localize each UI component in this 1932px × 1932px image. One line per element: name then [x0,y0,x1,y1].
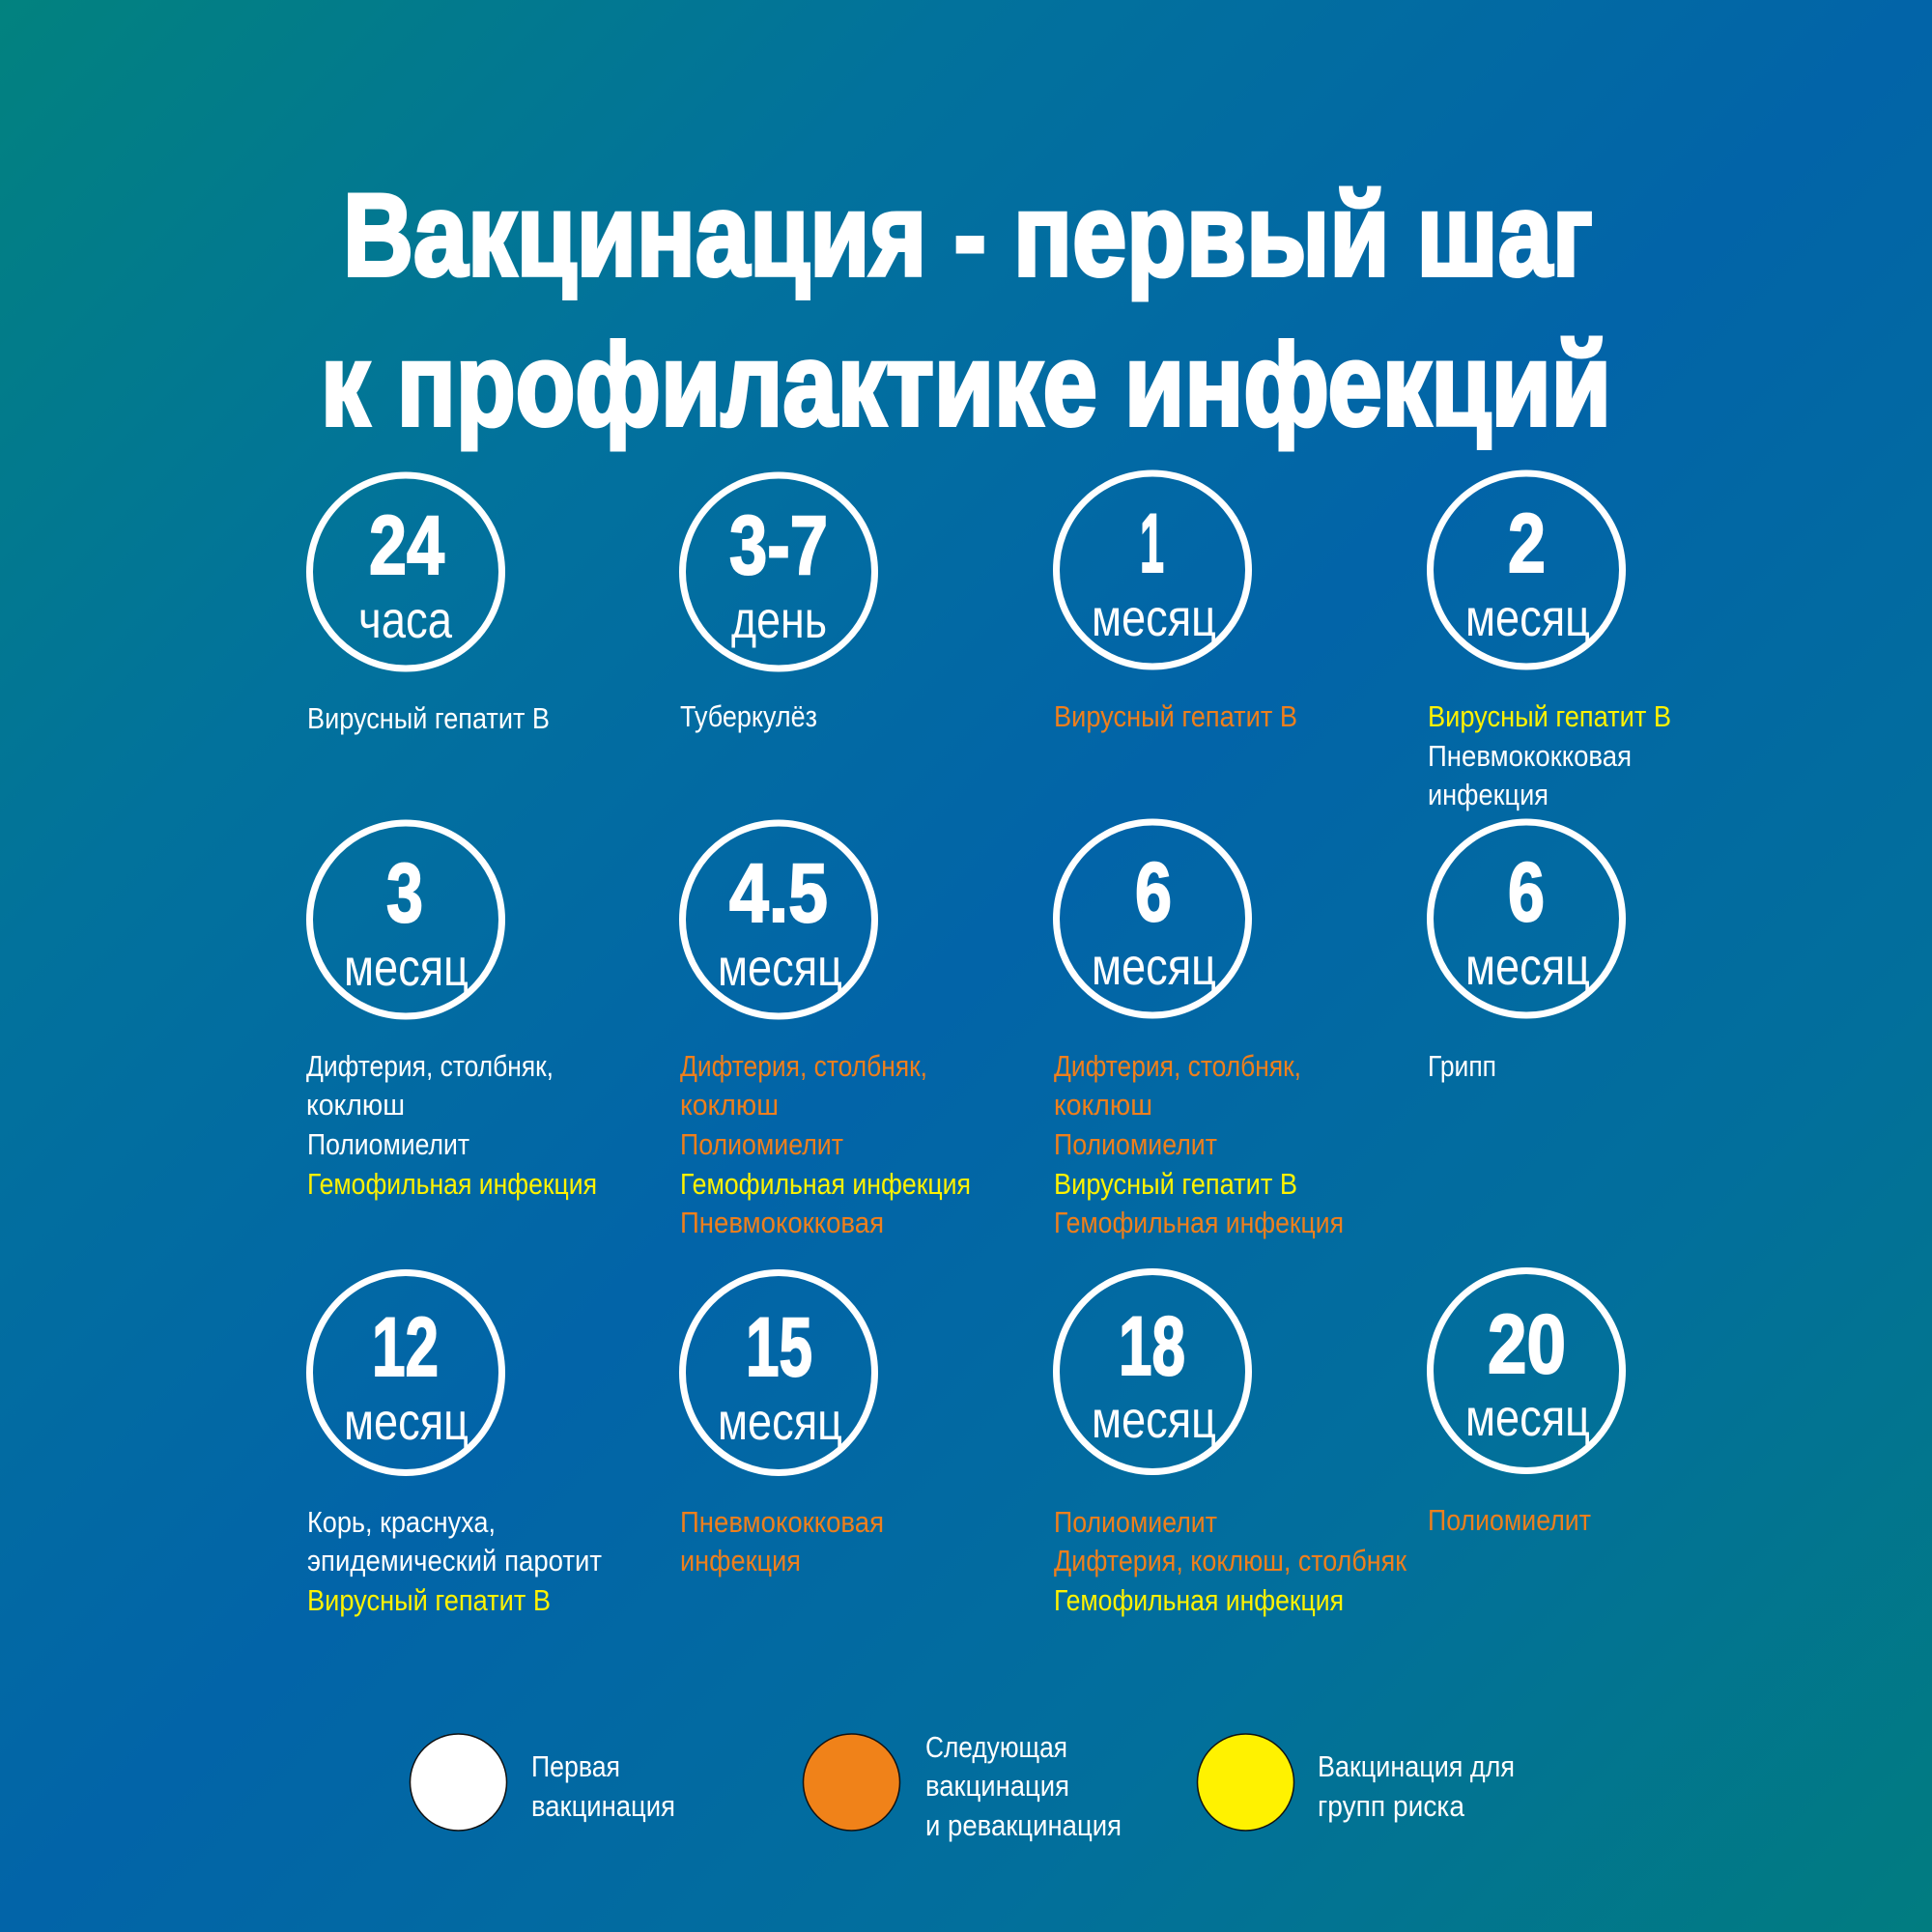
badge: 3 месяц [309,823,502,1016]
badge: 4.5 месяц: месяц [718,939,842,997]
panel: 24 hours: Вирусный гепатит В [307,701,550,735]
legend item: next vaccination and revaccination [804,1730,1122,1842]
panel: 15 months: инфекция [680,1544,801,1577]
panel: 12 months: Вирусный гепатит В [307,1583,551,1617]
panel: 4.5 months: коклюш [680,1088,779,1122]
badge: 20 месяц [1430,1271,1623,1470]
panel: 4.5 months: Пневмококковая [680,1206,884,1239]
panel: 6 months, first: Вирусный гепатит В [1054,1167,1297,1201]
badge: 2 месяц: 2 [1508,497,1546,590]
legend item: first vaccination [410,1734,675,1831]
badge: 4.5 месяц: 4.5 [729,847,828,940]
legend item: first vaccination: Первая [531,1749,620,1783]
badge: 24 часа [309,475,502,668]
panel: 18 months: Полиомиелит [1054,1505,1217,1539]
badge: 20 месяц: 20 [1488,1298,1566,1391]
panel: 15 months: Пневмококковая [680,1505,884,1539]
badge: 1 месяц: 1 [1140,497,1164,590]
panel: 18 months: Дифтерия, коклюш, столбняк [1054,1544,1406,1577]
panel: 2 months: Вирусный гепатит В [1428,699,1671,733]
panel: 1 month [1054,473,1297,733]
panel: 6 months, first: коклюш [1054,1088,1152,1122]
panel: 4.5 months: Дифтерия, столбняк, [680,1049,927,1083]
panel: 12 months: эпидемический паротит [307,1544,602,1577]
panel: 3 months: коклюш [306,1088,405,1122]
badge: 15 месяц: месяц [718,1393,842,1451]
badge: 6 месяц [1057,822,1248,1015]
panel: 3 months: Дифтерия, столбняк, [306,1049,554,1083]
panel: 3 months: Гемофильная инфекция [307,1167,597,1201]
panel: 4.5 months: Гемофильная инфекция [680,1167,971,1201]
badge: 18 месяц [1057,1271,1248,1472]
panel: 3-7 days [680,475,875,733]
badge: 2 месяц [1430,473,1623,667]
panel: 4.5 months [680,823,971,1239]
panel: 18 months: Гемофильная инфекция [1054,1583,1344,1617]
panel: 24 hours [307,475,550,735]
panel: 12 months [307,1273,602,1617]
badge: 3-7 день: 3-7 [729,499,828,592]
legend item: next vaccination and revaccination: и ревакцинация [925,1808,1122,1842]
panel: 2 months: Пневмококковая [1428,739,1632,773]
panel: 20 months: Полиомиелит [1428,1503,1591,1537]
panel: 6 months, first: Гемофильная инфекция [1054,1206,1344,1239]
badge: 12 месяц: 12 [372,1301,439,1394]
badge: 6 месяц: месяц [1092,938,1216,996]
badge: 12 месяц: месяц [344,1393,469,1451]
badge: 12 месяц [309,1273,502,1472]
badge: 1 месяц [1057,473,1248,667]
badge: 6 месяц: 6 [1508,846,1545,939]
badge: 4.5 месяц [682,823,875,1016]
badge: 3 месяц: 3 [386,847,423,940]
panel: 2 months [1428,473,1671,811]
panel: 4.5 months: Полиомиелит [680,1127,843,1161]
badge: 15 месяц: 15 [746,1301,812,1394]
panel: 6 months, flu [1428,822,1623,1083]
legend [410,1730,1515,1842]
title: к профилактике инфекций [321,319,1611,450]
badge: 1 месяц: месяц [1092,589,1216,647]
legend item: next vaccination and revaccination: Следующая [925,1730,1067,1764]
panel: 20 months [1428,1271,1623,1537]
panel: 1 month: Вирусный гепатит В [1054,699,1297,733]
title: Вакцинация - первый шаг [343,169,1593,300]
badge: 6 месяц: 6 [1135,846,1172,939]
badge: 3-7 день [682,475,875,668]
badge: 20 месяц: месяц [1465,1389,1590,1447]
panel: 6 months, first [1054,822,1344,1239]
legend item: next vaccination and revaccination: вакцинация [925,1769,1069,1803]
legend item: risk group vaccination: групп риска [1318,1789,1465,1823]
legend item: risk group vaccination [1198,1734,1515,1831]
badge: 15 месяц [682,1273,875,1472]
badge: 2 месяц: месяц [1465,589,1590,647]
panel: 6 months, flu: Грипп [1428,1049,1496,1083]
panel: 18 months [1054,1271,1406,1617]
badge: 6 месяц [1430,822,1623,1015]
badge: 3-7 день: день [731,591,827,649]
badge: 3 месяц: месяц [344,939,469,997]
panel: 6 months, first: Дифтерия, столбняк, [1054,1049,1301,1083]
badge: 24 часа: часа [358,591,453,649]
badge: 18 месяц: месяц [1092,1391,1216,1449]
badge: 6 месяц: месяц [1465,938,1590,996]
panel: 6 months, first: Полиомиелит [1054,1127,1217,1161]
panel: 15 months [680,1273,884,1577]
badge: 24 часа: 24 [369,499,444,592]
panel: 3 months: Полиомиелит [307,1127,469,1161]
legend item: risk group vaccination: Вакцинация для [1318,1749,1515,1783]
panel: 3 months [306,823,597,1201]
title [321,169,1611,450]
panel: 3-7 days: Туберкулёз [680,699,817,733]
panel: 12 months: Корь, краснуха, [307,1505,496,1539]
panel: 2 months: инфекция [1428,778,1548,811]
badge: 18 месяц: 18 [1119,1300,1185,1393]
legend item: first vaccination: вакцинация [531,1789,675,1823]
